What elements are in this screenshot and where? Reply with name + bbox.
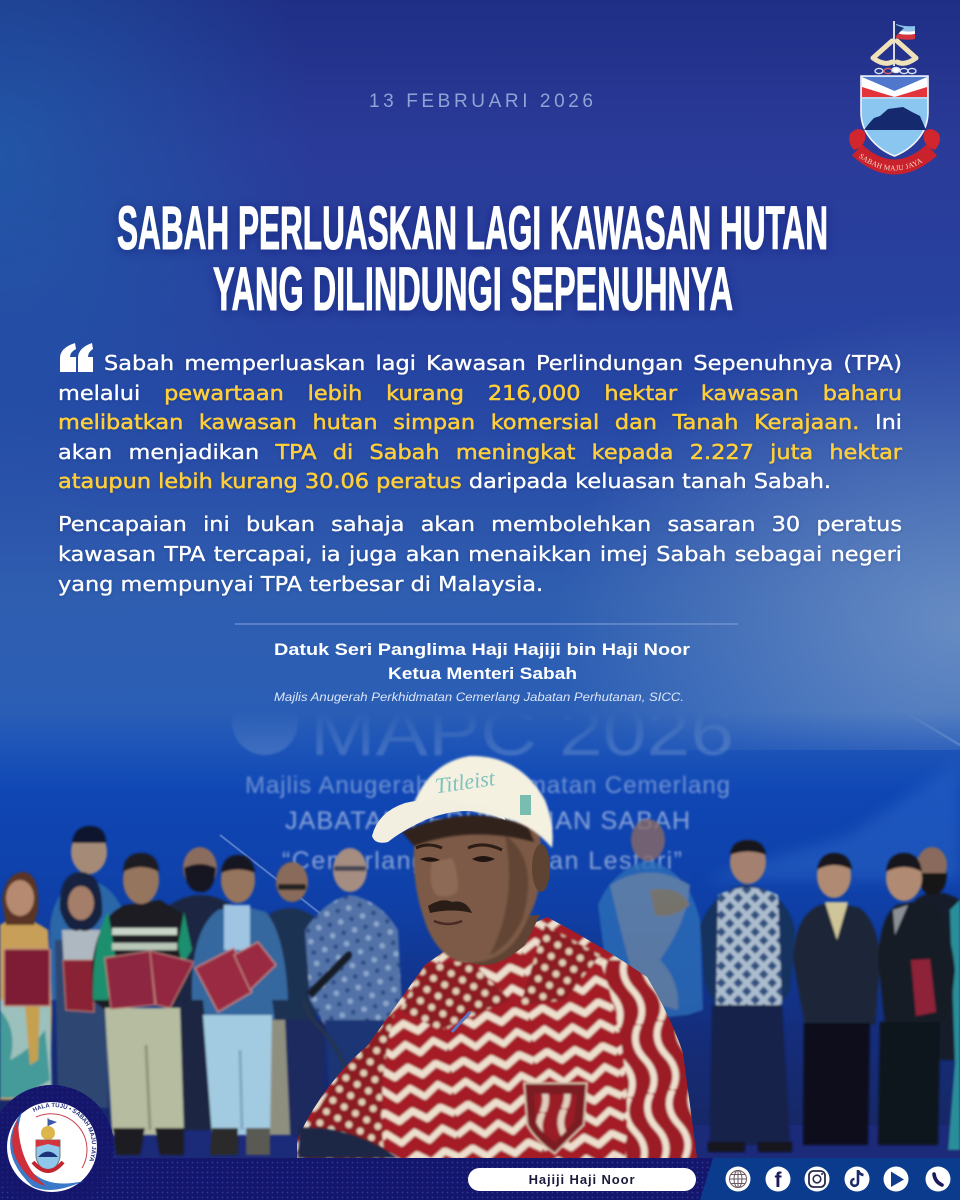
- bottom-left logo: Hala Tuju: [0, 1085, 114, 1198]
- attribution: name: Datuk Seri Panglima Haji Hajiji bin Haji Noor: [274, 640, 690, 659]
- group of award recipients: [0, 819, 960, 1155]
- name pill: Hajiji Haji Noor: [529, 1172, 635, 1187]
- person: man in colourful batik shawl: [598, 819, 703, 1020]
- person: man in striped shirt with certificates: [92, 853, 194, 1155]
- person: man in black suit with certificate: [878, 853, 955, 1145]
- person: man in blue blazer with certificates: [192, 855, 288, 1155]
- name pill: [468, 1168, 696, 1191]
- cap shadow: [402, 815, 534, 846]
- flag: [896, 24, 915, 40]
- paragraph 1: akan menjadikan TPA di Sabah meningkat kepada 2.227 juta hektar: [58, 440, 902, 464]
- microphone on stand: [303, 952, 352, 1130]
- cap visor: [372, 799, 505, 843]
- person: masked man at right: [915, 847, 960, 1150]
- screen text: MAPC 2026: MAPC 2026: [310, 694, 734, 770]
- bottom-left logo: Hala Tuju: HALA TUJU • SABAH MAJU JAYA: [32, 1102, 96, 1161]
- eyes: [420, 856, 495, 862]
- icon: facebook: [766, 1166, 790, 1192]
- shirt badge: [524, 1083, 587, 1154]
- paragraph 1: Sabah memperluaskan lagi Kawasan Perlindungan Sepenuhnya (TPA): [104, 351, 902, 375]
- person: man in dark shirt: [268, 862, 325, 1135]
- screen text: tagline: “Cemerlang Perhutanan Lestari”: [282, 847, 682, 875]
- date: 13 FEBRUARI 2026: [369, 91, 593, 112]
- neck: [445, 915, 540, 965]
- shirt right sleeve: [600, 960, 700, 1160]
- person: older man in blue batik: [305, 848, 402, 1100]
- face: [414, 820, 541, 963]
- certificates held: [195, 942, 276, 1012]
- mini crest: [33, 1118, 63, 1172]
- icon: play: [884, 1166, 908, 1192]
- scrolls: [849, 129, 940, 150]
- mouth: [434, 921, 462, 924]
- person: man with mask behind: [170, 847, 232, 1130]
- crest: Sabah coat of arms: [849, 21, 940, 174]
- paragraph 2: [58, 512, 902, 597]
- arms holding pole: [873, 41, 916, 63]
- crescent swoosh: [10, 1112, 84, 1190]
- icon: instagram: [804, 1166, 830, 1192]
- person: woman with certificate: [0, 872, 52, 1100]
- icon: phone: [926, 1166, 950, 1192]
- paragraph 1: [58, 351, 902, 494]
- person: man with songkok: [50, 826, 126, 1000]
- inner red arc: [36, 1114, 87, 1168]
- eyebrows: [416, 845, 502, 850]
- nose: [431, 858, 458, 897]
- icon: facebook: f: [774, 1169, 782, 1192]
- paragraph 1: melalui pewartaan lebih kurang 216,000 hektar kawasan baharu: [58, 381, 902, 405]
- stage floor: [0, 1125, 960, 1160]
- mountain: [864, 107, 926, 130]
- certificates held: [105, 951, 194, 1009]
- bottom bar: [0, 1158, 960, 1200]
- paragraph 1: ataupun lebih kurang 30.06 peratus daripada keluasan tanah Sabah.: [58, 469, 831, 493]
- cheek shading: [490, 835, 528, 955]
- shield chief: [862, 77, 927, 97]
- screen text: Jabatan: JABATAN PERHUTANAN SABAH: [285, 807, 690, 835]
- person: man in dark suit: [793, 853, 880, 1145]
- logo text ring: [34, 1107, 92, 1171]
- moustache: [428, 900, 472, 913]
- motto ribbon: [857, 150, 932, 167]
- attribution: event: Majlis Anugerah Perkhidmatan Cemerlang Jabatan Perhutanan, SICC.: [274, 692, 684, 704]
- screen text: Majlis Anugerah: Majlis Anugerah Perkhidmatan Cemerlang: [245, 772, 730, 799]
- crest: Sabah coat of arms: SABAH MAJU JAYA: [859, 154, 923, 170]
- pen in pocket: [452, 1012, 470, 1032]
- title: [117, 194, 828, 323]
- paragraph 1: melibatkan kawasan hutan simpan komersial dan Tanah Kerajaan. Ini: [58, 410, 902, 434]
- beads: [875, 67, 916, 74]
- icon: globe: [726, 1166, 750, 1192]
- shirt collar panels: [520, 925, 600, 1005]
- paragraph 2: yang mempunyai TPA terbesar di Malaysia.: [58, 572, 543, 596]
- flagpole: [893, 21, 895, 66]
- person: man in navy batik: [700, 840, 795, 1152]
- paragraph 2: kawasan TPA tercapai, ia juga akan menaikkan imej Sabah sebagai negeri: [58, 542, 902, 566]
- quote text block: [58, 351, 902, 597]
- cap logo text: Titleist: [433, 765, 497, 798]
- divider: [235, 623, 738, 625]
- person: woman in hijab: [55, 872, 108, 1108]
- main figure: Chief Minister: [290, 756, 710, 1160]
- microphone base: [298, 1128, 398, 1158]
- shirt: [290, 910, 710, 1160]
- screen logo circle: [233, 722, 297, 756]
- attribution: role: Ketua Menteri Sabah: [388, 664, 577, 683]
- icon: tiktok: [844, 1166, 870, 1192]
- ear: [532, 844, 550, 892]
- cap side mark: [520, 795, 531, 815]
- paragraph 2: Pencapaian ini bukan sahaja akan membolehkan sasaran 30 peratus: [58, 512, 902, 536]
- shirt left dotted panel: [295, 1010, 395, 1160]
- shield: [861, 76, 928, 156]
- cap crown: [413, 756, 553, 848]
- icon: quotation mark: [60, 343, 93, 372]
- stage backdrop photo with screen text: [0, 689, 960, 1160]
